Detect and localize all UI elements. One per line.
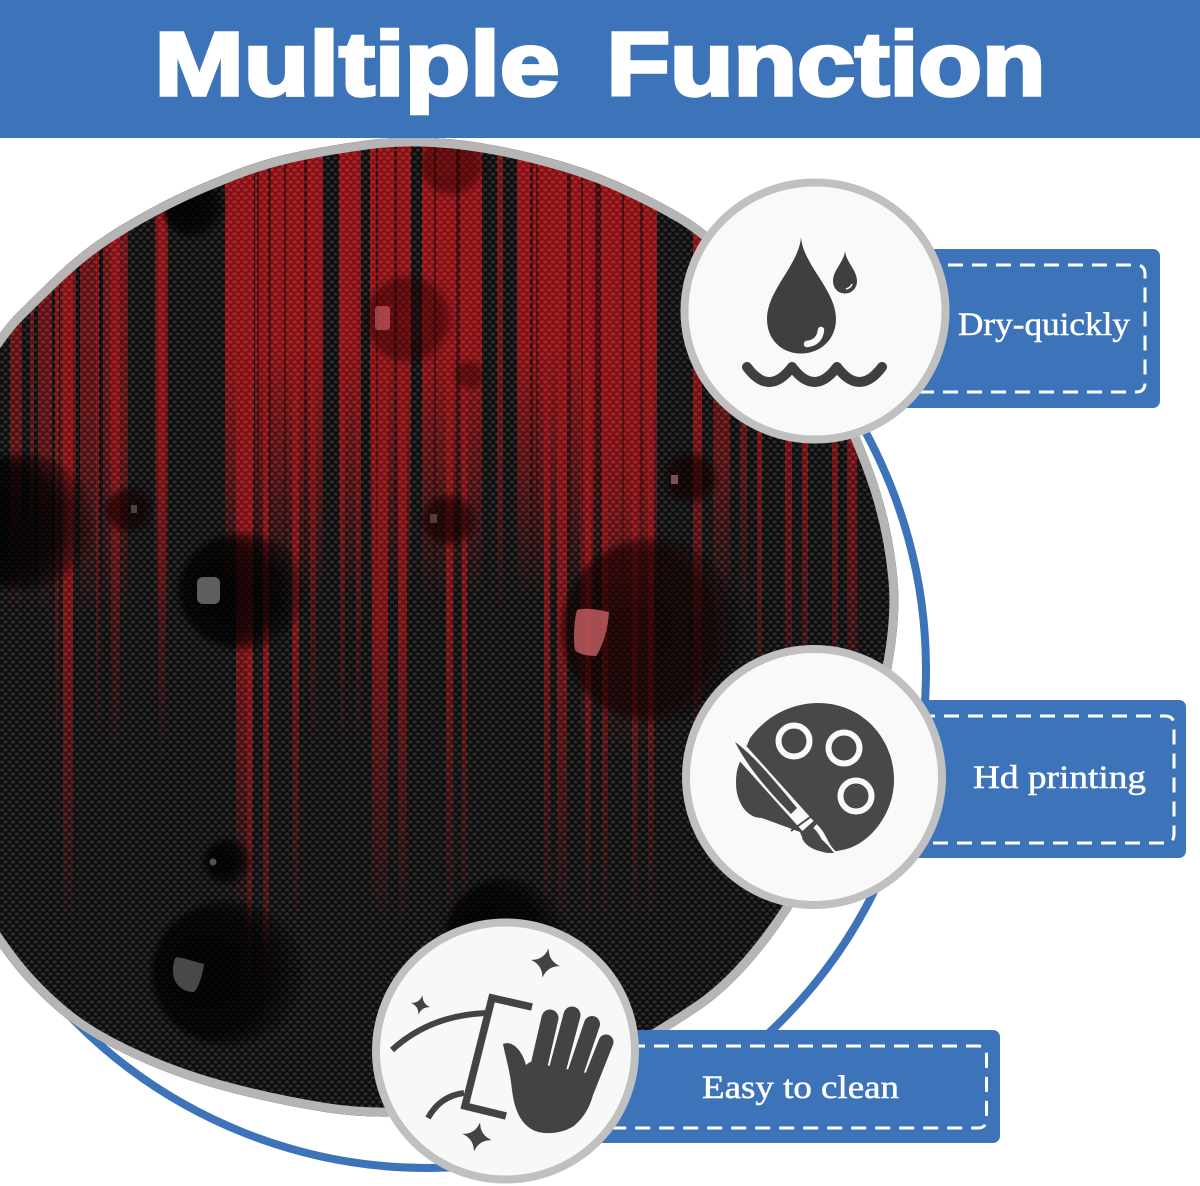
panel: hd printing label bbox=[880, 700, 1186, 858]
panel: easy to clean label bbox=[590, 1030, 1000, 1143]
title: Multiple bbox=[154, 15, 560, 115]
grey swatch rim bbox=[0, 137, 898, 1117]
blue outline ring behind fabric bbox=[0, 172, 926, 1168]
droplet highlights bbox=[131, 306, 678, 992]
title: Function bbox=[606, 15, 1046, 115]
thin dark lines inside red bands bbox=[78, 140, 643, 640]
icon: paint palette and brush bbox=[686, 649, 942, 905]
water droplets bbox=[0, 135, 742, 1045]
label text: Easy to clean: Easy to clean bbox=[702, 1070, 899, 1106]
icon: water drops over waves bbox=[684, 182, 946, 440]
label text: Hd printing: Hd printing bbox=[973, 760, 1146, 796]
header band bbox=[0, 0, 1200, 138]
red vertical stripes bbox=[10, 140, 857, 962]
icon: hand wiping with sparkles bbox=[376, 922, 635, 1180]
panel: circular fabric swatch bbox=[0, 130, 910, 1140]
label text: Dry-quickly: Dry-quickly bbox=[958, 307, 1131, 343]
panel: dry-quickly label bbox=[860, 249, 1160, 408]
woven fabric texture bbox=[0, 130, 910, 1130]
title bbox=[154, 15, 1046, 115]
